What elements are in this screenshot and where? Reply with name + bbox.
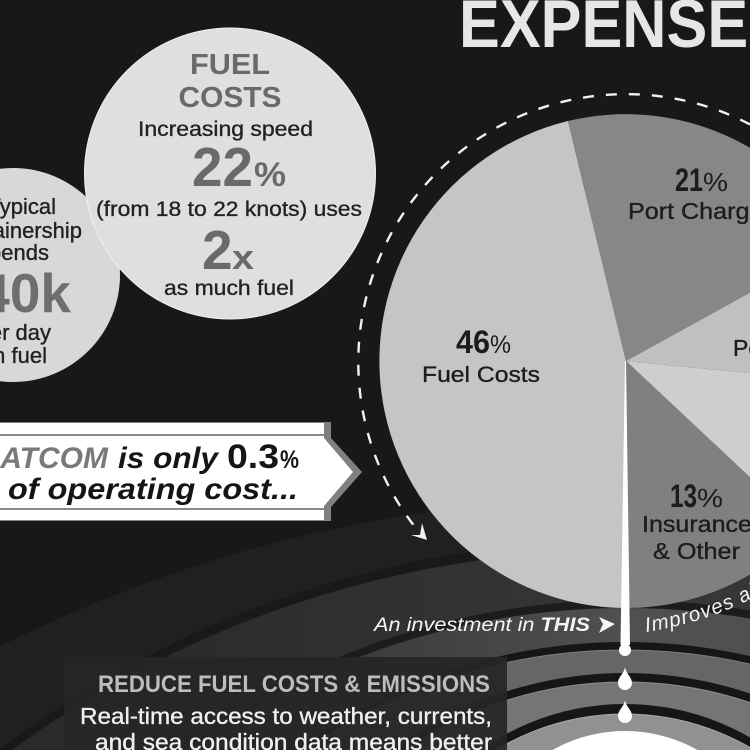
increasing speed label: Increasing speed [138,118,313,141]
spending text [0,194,82,368]
ribbon text line 1 [0,438,299,476]
label: 21 percent port charges [630,168,748,224]
panel: typical containership spending circle [0,168,120,382]
label: 46 percent fuel costs: 46 [456,324,490,360]
arrow: dashed arc around pie [358,94,750,540]
fuel costs heading: COSTS [178,82,282,114]
label: 46 percent fuel costs: % [490,331,511,359]
fuel costs heading [178,49,282,114]
22 percent stat: % [254,156,286,194]
label: 13 percent insurance and other: & Other [653,538,740,564]
panel: reduce fuel costs and emissions [64,657,507,750]
as much fuel label: as much fuel [164,277,294,300]
ribbon text line 1: 0.3 [227,438,279,476]
label: 46 percent fuel costs [424,330,540,382]
slice: fuel costs [379,121,626,608]
label: 13 percent insurance and other [644,484,750,560]
22 percent stat: 22 [192,136,253,198]
arrow: caption chevron [599,617,615,633]
slice: insurance and other [626,361,750,608]
label: 21 percent port charges: % [703,167,728,197]
drop 2 [618,700,632,723]
label: 13 percent insurance and other: % [697,483,723,513]
ribbon text line 1: is only [118,442,219,475]
slice: port charges [568,114,750,361]
panel: fuel costs circle [84,28,376,319]
label: 46 percent fuel costs: Fuel Costs [422,362,540,387]
fuel costs heading: FUEL [190,49,270,81]
caption: an investment in this: An investment in THIS [373,615,590,636]
connector: white tapered line with drops [618,361,632,723]
slice: light segment [626,361,750,478]
panel heading: REDUCE FUEL COSTS & EMISSIONS [98,671,490,698]
from 18 to 22 knots label: (from 18 to 22 knots) uses [96,198,362,221]
label: 21 percent port charges: 21 [675,162,703,198]
slice: personnel [626,292,750,373]
panel body text [80,703,492,750]
label: 13 percent insurance and other: 13 [670,478,697,514]
ribbon callout: satcom share [0,422,362,521]
pie chart: expenses [379,114,750,608]
label: 13 percent insurance and other: Insurance [642,511,750,537]
22 percent stat [192,136,286,198]
ribbon text line 1: % [280,446,299,474]
panel body text: Real-time access to weather, currents, [80,703,492,729]
concentric background rings [0,498,750,750]
2x stat: 2 [202,219,233,281]
2x stat: x [232,239,254,277]
drop 1 [618,667,632,690]
2x stat [202,219,254,281]
ribbon text line 2: of operating cost... [8,473,298,506]
